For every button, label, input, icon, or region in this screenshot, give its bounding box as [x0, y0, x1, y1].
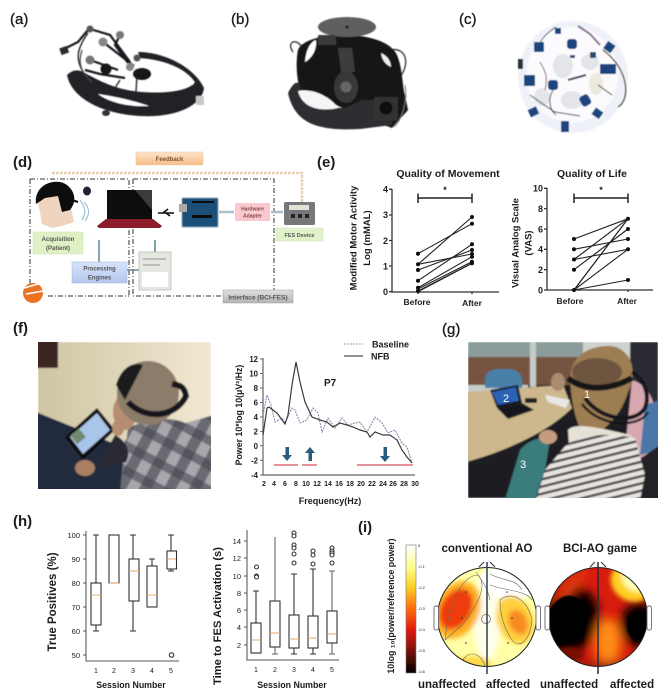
chart: quality of movement: 2 — [383, 236, 388, 246]
chart: P7 power spectrum — [234, 340, 419, 506]
panel d: BCI-FES system diagram — [13, 152, 323, 303]
panel b: EEG headset photo — [231, 11, 408, 129]
chart: P7 power spectrum: 22 — [368, 481, 376, 488]
chart: time to FES activation box plot — [212, 530, 339, 690]
chart: quality of life — [510, 168, 653, 306]
chart: time to FES activation box plot: 8 — [237, 589, 241, 598]
chart: true positives box plot: 90 — [72, 555, 80, 564]
chart: true positives box plot — [47, 531, 179, 690]
chart: time to FES activation box plot: 6 — [237, 606, 241, 615]
topomap: BCI-AO game — [544, 562, 652, 674]
chart: quality of life: 0 — [538, 286, 543, 296]
chart: quality of movement: 0 — [383, 287, 388, 297]
chart: P7 power spectrum: 18 — [346, 481, 354, 488]
chart: time to FES activation box plot: 4 — [237, 623, 241, 632]
icon: FES device — [284, 202, 315, 225]
chart: P7 power spectrum: 16 — [335, 481, 343, 488]
chart: time to FES activation box plot: 3 — [292, 667, 296, 674]
chart: quality of life: Visual Analog Scale — [510, 198, 522, 288]
chart: P7 power spectrum: Power 10*log 10(μV²/Hz) — [234, 365, 244, 465]
processing engines box: Engines — [88, 276, 112, 282]
label d: (d) — [13, 154, 32, 171]
panel h: box plots — [13, 513, 339, 690]
acquisition label: (Patient) — [46, 246, 70, 252]
band arrows — [282, 447, 390, 462]
colour bar: -0.5 — [418, 648, 426, 653]
icon: orange logo — [23, 283, 43, 303]
chart: P7 power spectrum: 30 — [411, 481, 419, 488]
chart: P7 power spectrum: 4 — [272, 481, 276, 488]
colour bar — [406, 543, 426, 674]
acquisition label — [33, 232, 83, 254]
arrow: adapter to device — [271, 211, 283, 213]
arrow: processing to software — [127, 269, 139, 271]
hemisphere labels: affected — [610, 679, 654, 691]
feedback box: Feedback — [156, 157, 184, 163]
chart: time to FES activation box plot: 2 — [273, 667, 277, 674]
photo number labels — [503, 389, 590, 471]
label g: (g) — [442, 321, 460, 338]
chart: true positives box plot: 80 — [72, 579, 80, 588]
chart: true positives box plot: 5 — [169, 668, 173, 675]
chart: quality of movement: Quality of Movement — [396, 168, 500, 180]
chart: quality of life: 2 — [538, 265, 543, 275]
chart: time to FES activation box plot: 14 — [233, 537, 241, 546]
chart: P7 power spectrum: 12 — [249, 355, 259, 364]
chart: time to FES activation box plot: Session Number — [257, 680, 327, 690]
colour bar: -0.3 — [418, 606, 426, 611]
chart: quality of movement: * — [443, 185, 447, 195]
chart: quality of movement: 3 — [383, 210, 388, 220]
chart: P7 power spectrum: -2 — [251, 456, 259, 466]
label c: (c) — [459, 11, 476, 28]
chart: quality of movement: 4 — [383, 184, 388, 194]
chart: time to FES activation box plot: 12 — [233, 554, 241, 563]
label i: (i) — [358, 519, 372, 536]
icon: usb symbol — [158, 209, 174, 216]
photo: man wearing headset with tablet — [36, 340, 214, 492]
chart: P7 power spectrum: 2 — [254, 428, 259, 436]
icon: patient head with headset — [36, 182, 91, 228]
chart: true positives box plot: 4 — [150, 668, 154, 675]
hardware adapter box: Hardware — [241, 206, 264, 212]
panel c: EEG electrode cap photo — [459, 11, 628, 133]
FES device label — [276, 228, 323, 241]
topomap: conventional AO — [424, 562, 542, 674]
chart: P7 power spectrum: 6 — [283, 481, 287, 488]
acquisition label: Acquisition — [42, 237, 75, 243]
hardware adapter box: Adapter — [243, 214, 262, 220]
hardware adapter box — [235, 203, 270, 221]
interface label: Interface (BCI-FES) — [228, 294, 288, 302]
colour bar: -0.2 — [418, 585, 426, 590]
chart: true positives box plot: Session Number — [96, 680, 166, 690]
icon: arduino board — [179, 198, 218, 227]
chart: P7 power spectrum: 12 — [313, 481, 321, 488]
hemisphere labels — [418, 679, 654, 691]
panel f: neurofeedback photo and spectrum — [13, 320, 419, 506]
colour bar: 0 — [418, 543, 421, 548]
photo number labels: 1 — [584, 389, 590, 401]
chart: quality of life: 6 — [538, 224, 543, 234]
BCI system dash-dot frames — [30, 179, 274, 296]
chart: true positives box plot: 100 — [67, 531, 80, 540]
chart: quality of life: 4 — [538, 244, 543, 254]
chart: P7 power spectrum: 20 — [357, 481, 365, 488]
software window screenshot — [139, 252, 171, 290]
chart: time to FES activation box plot: 2 — [237, 641, 241, 650]
photo: woman with headset at table — [466, 342, 660, 500]
chart: quality of life: * — [599, 185, 603, 195]
processing engines box — [72, 262, 127, 283]
chart: true positives box plot: 60 — [72, 627, 80, 636]
label b: (b) — [231, 11, 249, 28]
icon: headset b — [288, 17, 408, 129]
colour bar: -0.6 — [418, 669, 426, 674]
chart: P7 power spectrum: 24 — [379, 481, 387, 488]
hemisphere labels: unaffected — [418, 679, 476, 691]
chart: true positives box plot: 70 — [72, 603, 80, 612]
icon: electrode cap — [518, 21, 628, 133]
photo number labels: 2 — [503, 393, 509, 405]
chart: quality of movement: Modified Motor Activity — [348, 185, 360, 290]
chart: quality of life: (VAS) — [524, 230, 534, 256]
panel g: photo of user with headset and laptop — [442, 321, 660, 500]
chart: quality of movement: After — [462, 298, 483, 308]
chart: time to FES activation box plot: Time to FES Activation (s) — [212, 547, 224, 685]
interface label — [223, 290, 293, 303]
arrow: laptop to processing — [98, 240, 100, 262]
chart: time to FES activation box plot: 4 — [311, 667, 315, 674]
chart: P7 power spectrum: 8 — [294, 481, 298, 488]
icon: headset a — [59, 26, 204, 116]
chart: P7 power spectrum: 4 — [254, 413, 259, 422]
chart: P7 power spectrum: 0 — [254, 442, 259, 451]
panel a: EEG headset photo — [10, 11, 204, 116]
chart: P7 power spectrum: 10 — [249, 370, 259, 378]
chart: quality of life: Quality of Life — [557, 168, 627, 180]
feedback box — [136, 152, 203, 165]
chart: time to FES activation box plot: 1 — [254, 667, 258, 674]
chart: P7 power spectrum: 26 — [389, 481, 397, 488]
chart: quality of movement: Before — [404, 297, 431, 307]
chart: true positives box plot: True Positives (%) — [47, 552, 59, 652]
chart: P7 power spectrum: -4 — [251, 471, 259, 480]
label f: (f) — [13, 320, 28, 337]
chart: P7 power spectrum: P7 — [324, 378, 337, 389]
chart: quality of life: 8 — [538, 204, 543, 214]
hemisphere labels: affected — [486, 679, 530, 691]
legend: Baseline — [372, 340, 409, 350]
label h: (h) — [13, 513, 32, 530]
arrow: software to laptop — [154, 240, 156, 252]
chart: P7 power spectrum: 2 — [262, 481, 266, 488]
panel i: topographic EEG maps — [358, 519, 661, 691]
photo number labels: 3 — [520, 459, 526, 471]
chart: quality of movement — [348, 168, 500, 308]
arrow: arduino to adapter — [219, 211, 234, 213]
icon: laptop — [97, 190, 162, 228]
chart: quality of life: 10 — [533, 184, 543, 194]
chart: P7 power spectrum: 10 — [302, 481, 310, 488]
feedback dotted arrow — [52, 173, 302, 202]
chart: true positives box plot: 3 — [131, 668, 135, 675]
colour bar: -0.4 — [418, 627, 426, 632]
colour bar: -0.1 — [418, 564, 426, 569]
legend — [344, 340, 409, 362]
panel e: quality of movement and quality of life charts — [317, 154, 653, 308]
chart: true positives box plot: 1 — [94, 668, 98, 675]
chart: P7 power spectrum: 8 — [254, 384, 259, 393]
label a: (a) — [10, 11, 28, 28]
legend: NFB — [371, 352, 390, 362]
chart: P7 power spectrum: 28 — [400, 481, 408, 488]
heading: conventional AO: conventional AO — [442, 543, 533, 555]
chart: P7 power spectrum: Frequency(Hz) — [299, 496, 361, 506]
FES device label: FES Device — [285, 233, 314, 239]
chart: P7 power spectrum: 6 — [254, 398, 259, 408]
hemisphere labels: unaffected — [540, 679, 598, 691]
chart: quality of life: Before — [557, 296, 584, 306]
chart: time to FES activation box plot: 10 — [233, 572, 241, 581]
chart: time to FES activation box plot: 5 — [330, 667, 334, 674]
label e: (e) — [317, 154, 335, 171]
chart: quality of life: After — [617, 296, 638, 306]
chart: true positives box plot: 50 — [72, 651, 80, 660]
chart: true positives box plot: 2 — [112, 668, 116, 675]
heading: BCI-AO game: BCI-AO game — [563, 543, 637, 555]
processing engines box: Processing — [83, 266, 116, 272]
chart: quality of movement: Log (mMAL) — [362, 210, 373, 266]
y axis label: 10log ₁₀(power/reference power) — [386, 538, 396, 674]
chart: quality of movement: 1 — [383, 262, 388, 272]
chart: P7 power spectrum: 14 — [324, 481, 332, 488]
